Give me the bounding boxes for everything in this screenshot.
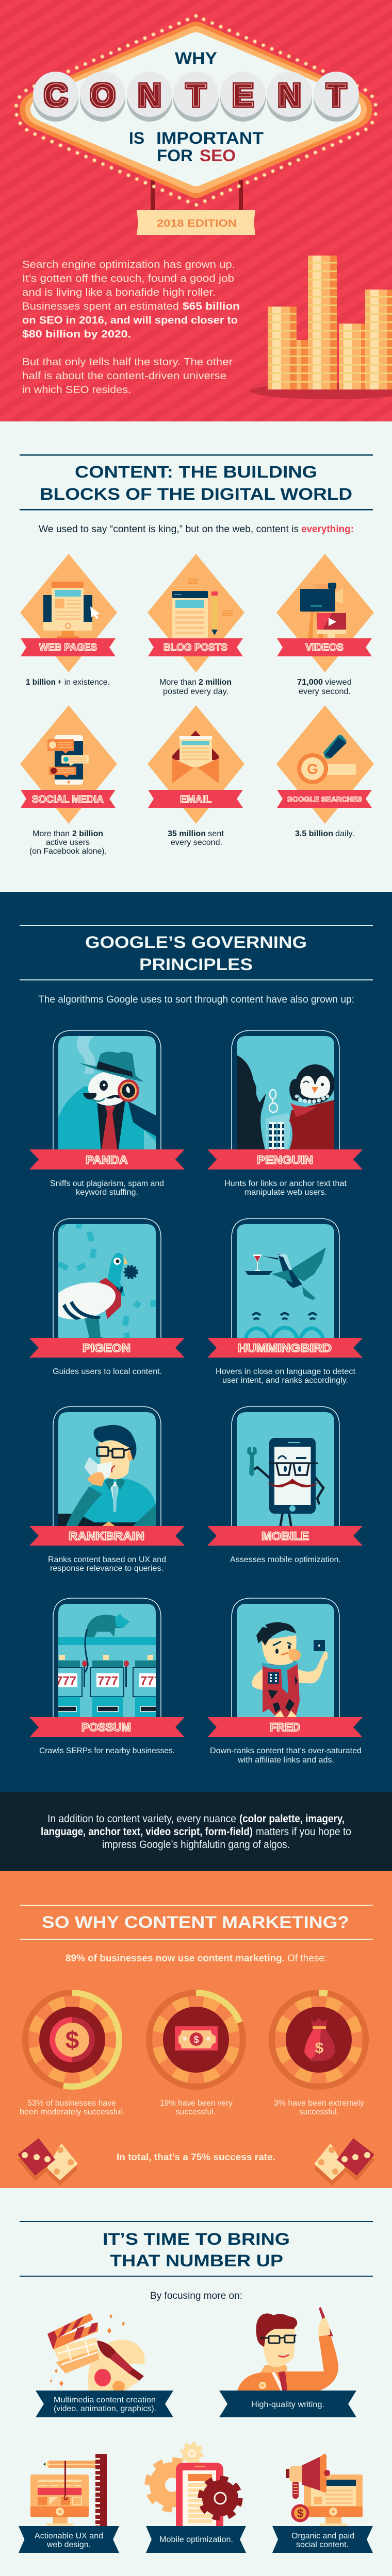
icon: man with raised pencil [237,2307,338,2391]
card: rankbrain: Ranks content based on UX and [48,1555,166,1564]
card: fred [207,1598,363,1765]
card: pigeon [29,1218,185,1376]
icon: video camera and player [300,583,346,638]
stat: web pages: + in existence. [57,678,110,687]
panel: nuance callout: impress Google’s highfalutin gang of algos. [102,1839,290,1851]
stat: blog posts: More than [159,678,197,687]
card: possum: Crawls SERPs for nearby businesses. [39,1747,175,1755]
panel: bring that number up [0,2188,392,2576]
card: hummingbird [207,1218,363,1385]
text block: intro: and is living like a bonafide high roller. [22,287,216,298]
card: possum: 777 [97,1674,118,1687]
card: penguin: Hunts for links or anchor text that [224,1179,347,1188]
stat: videos [297,678,352,696]
bulbs around the casino sign [16,16,376,205]
block: google searches: GOOGLE SEARCHES [287,795,362,803]
icon: monitor with ruler and pencil [30,2454,107,2526]
card: penguin: PENGUIN [257,1154,313,1166]
stat: google searches: 3.5 billion [295,829,333,838]
sign posts [151,180,243,211]
chart: 19 percent ring [149,1993,243,2087]
heading: PRINCIPLES [139,955,253,974]
title: Content: O [90,78,115,113]
text block: intro: $65 billion [183,301,240,312]
card: penguin [207,1030,363,1197]
card: rankbrain: RANKBRAIN [69,1530,144,1543]
stat: social media [29,829,107,856]
panel: governing principles [0,892,392,1792]
block: blog posts: BLOG POSTS [164,642,227,653]
title: is important for SEO: IS [129,129,144,147]
intro text: By focusing more on: [150,2291,242,2301]
card: hummingbird: user intent, and ranks accordingly. [222,1376,348,1385]
card: pigeon: PIGEON [83,1342,130,1354]
title: is important for SEO [129,129,264,165]
icon: magnifier with G [297,735,356,784]
icon: coin stacks [250,256,392,399]
panel: nuance callout: (color palette, imagery, [239,1813,345,1825]
panel: building blocks [0,421,392,892]
icon: monitor with megaphone and coin: $ [297,2507,303,2520]
title: Why: WHY [175,49,217,67]
stat captions: successful. [299,2108,339,2116]
panel: nuance callout [0,1792,392,1871]
panel: nuance callout: matters if you hope to [256,1826,351,1838]
stat captions: 19% have been very [160,2099,233,2108]
intro text: Of these: [287,1953,327,1964]
panel: hero [0,0,392,421]
title: Content: C [44,78,67,113]
icon: monitor with web page [43,582,100,638]
stat: social media: (on Facebook alone). [29,847,107,856]
text block: intro: in which SEO resides. [22,384,131,396]
item: mobile optimization [146,2443,246,2553]
card: mobile [207,1406,363,1564]
title: Content: E [232,78,254,113]
heading: BLOCKS OF THE DIGITAL WORLD [40,485,352,503]
item: ux and web design: Actionable UX and [35,2532,103,2540]
item: multimedia content: Multimedia content creation [54,2396,156,2404]
item: ux and web design [19,2454,119,2553]
stat captions: 3% have been extremely [274,2099,364,2108]
panel: nuance callout: language, anchor text, video script, form-field) [41,1826,253,1838]
success rate text: In total, that’s a 75% success rate. [117,2152,275,2162]
icon: clapper and palette [47,2313,145,2392]
icon: phone with chat bubbles [47,735,89,785]
card: penguin: manipulate web users. [244,1188,327,1197]
chart: 3 percent ring [272,1993,366,2087]
title: Content: N [138,78,161,113]
item: multimedia content: (video, animation, graphics). [54,2404,156,2413]
icon: monitor with megaphone and coin [286,2454,363,2526]
card: panda: PANDA [86,1154,128,1166]
block: web pages [20,554,117,672]
heading: IT’S TIME TO BRING [103,2230,290,2248]
item: social content: Organic and paid [291,2532,354,2540]
text block: intro: Search engine optimization has grown up. [22,259,235,270]
card: possum: POSSUM [81,1721,131,1734]
heading: THAT NUMBER UP [110,2251,283,2270]
card: rankbrain [29,1406,185,1573]
card: possum [29,1598,185,1755]
stat: social media: active users [46,838,90,847]
item: high-quality writing: High-quality writing. [251,2400,324,2409]
icon: phone with gears [148,2443,240,2526]
text block: intro: half is about the content-driven universe [22,370,226,382]
block: videos [276,554,374,672]
title: is important for SEO: IMPORTANT [156,129,264,147]
text block: intro: But that only tells half the story. The other [22,357,233,368]
item: ux and web design: web design. [46,2540,91,2549]
stat: web pages: 1 billion [26,678,56,687]
block: social media: SOCIAL MEDIA [32,794,104,805]
icon: envelope with letter [172,731,219,783]
icon: blog post and pencil [172,579,233,638]
card: possum: 777 [140,1674,161,1687]
card: possum: 777 [56,1674,76,1687]
heading: CONTENT: THE BUILDING [75,463,317,481]
intro text: everything: [301,524,354,535]
heading [85,933,307,974]
block: google searches [276,705,374,824]
icon: dice right [314,2138,374,2185]
stat captions: successful. [176,2108,216,2116]
title: is important for SEO: SEO [200,146,236,165]
block: videos: VIDEOS [305,642,344,653]
title: is important for SEO: FOR [157,146,193,165]
icon: money bag: $ [315,2040,324,2057]
intro text: We used to say “content is king,” but on the web, content is [39,524,299,535]
stat: blog posts [159,678,232,696]
heading [40,463,352,503]
text block: intro: Businesses spent an estimated [22,301,179,312]
heading [103,2230,290,2270]
card: mobile: MOBILE [262,1530,309,1543]
edition banner [137,210,255,235]
text block: intro: It’s gotten off the couch, found a good job [22,273,234,284]
intro text: 89% of businesses now use content marketing. [66,1953,285,1964]
block: blog posts [148,554,244,672]
text block: intro [22,259,240,396]
title: Content [44,78,346,113]
stat: social media: 2 billion [72,829,103,838]
panel: why content marketing [0,1871,392,2188]
item: social content: social content. [296,2540,349,2549]
stat captions: 53% of businesses have [27,2099,116,2108]
sign: diamond board [20,22,372,198]
heading: GOOGLE’S GOVERNING [85,933,307,952]
marquee circles [33,72,359,122]
stat: videos: every second. [299,687,351,696]
block: web pages: WEB PAGES [39,642,97,653]
icon: banknote [175,2026,218,2050]
block: email [148,705,244,824]
item: mobile optimization: Mobile optimization. [159,2535,233,2544]
item: high-quality writing [219,2307,356,2417]
text block: intro: $80 billion by 2020. [22,329,131,340]
card: fred: FRED [270,1721,300,1734]
item: multimedia content [36,2313,173,2417]
stat: videos: viewed [325,678,352,687]
icon: banknote: $ [193,2035,199,2045]
stat: google searches: daily. [335,829,354,838]
panel: nuance callout: In addition to content variety, every nuance [47,1813,236,1825]
stat: email: sent [208,829,224,838]
card: hummingbird: HUMMINGBIRD [238,1342,332,1354]
card: panda [29,1030,185,1197]
icon: magnifier with G: G [307,761,318,777]
icon: dice left [18,2138,78,2185]
block: social media [20,705,117,824]
stat: email: every second. [171,838,222,847]
card: panda: Sniffs out plagiarism, spam and [50,1179,164,1188]
card: mobile: Assesses mobile optimization. [230,1555,341,1564]
stat: email [168,829,224,847]
stat captions: been moderately successful. [20,2108,124,2116]
card: pigeon: Guides users to local content. [53,1367,162,1376]
stat: blog posts: 2 million [199,678,232,687]
icon: money bag [304,2018,335,2061]
item: social content [272,2454,373,2553]
title: Content: T [326,78,346,113]
block: email: EMAIL [180,794,211,805]
card: fred: Down-ranks content that’s over-saturated [210,1747,362,1755]
icon: casino chip: $ [66,2027,79,2054]
card: hummingbird: Hovers in close on language to detect [216,1367,356,1376]
chart: 53 percent ring [25,1993,119,2087]
text block: intro: on SEO in 2016, and will spend closer to [22,315,238,326]
icon: casino chip [50,2017,95,2062]
stat: blog posts: posted every day. [163,687,228,696]
stat: social media: More than [32,829,70,838]
card: panda: keyword stuffing. [76,1188,138,1197]
stat: email: 35 million [168,829,206,838]
card: fred: with affiliate links and ads. [237,1756,334,1765]
stat: videos: 71,000 [297,678,323,687]
edition banner: 2018 EDITION [157,218,237,229]
intro text: The algorithms Google uses to sort through content have also grown up: [38,994,354,1005]
heading: SO WHY CONTENT MARKETING? [42,1913,349,1931]
title: Content: N [278,78,301,113]
stat captions [20,2099,364,2116]
card: rankbrain: response relevance to queries. [50,1564,164,1573]
title: Content: T [186,78,206,113]
